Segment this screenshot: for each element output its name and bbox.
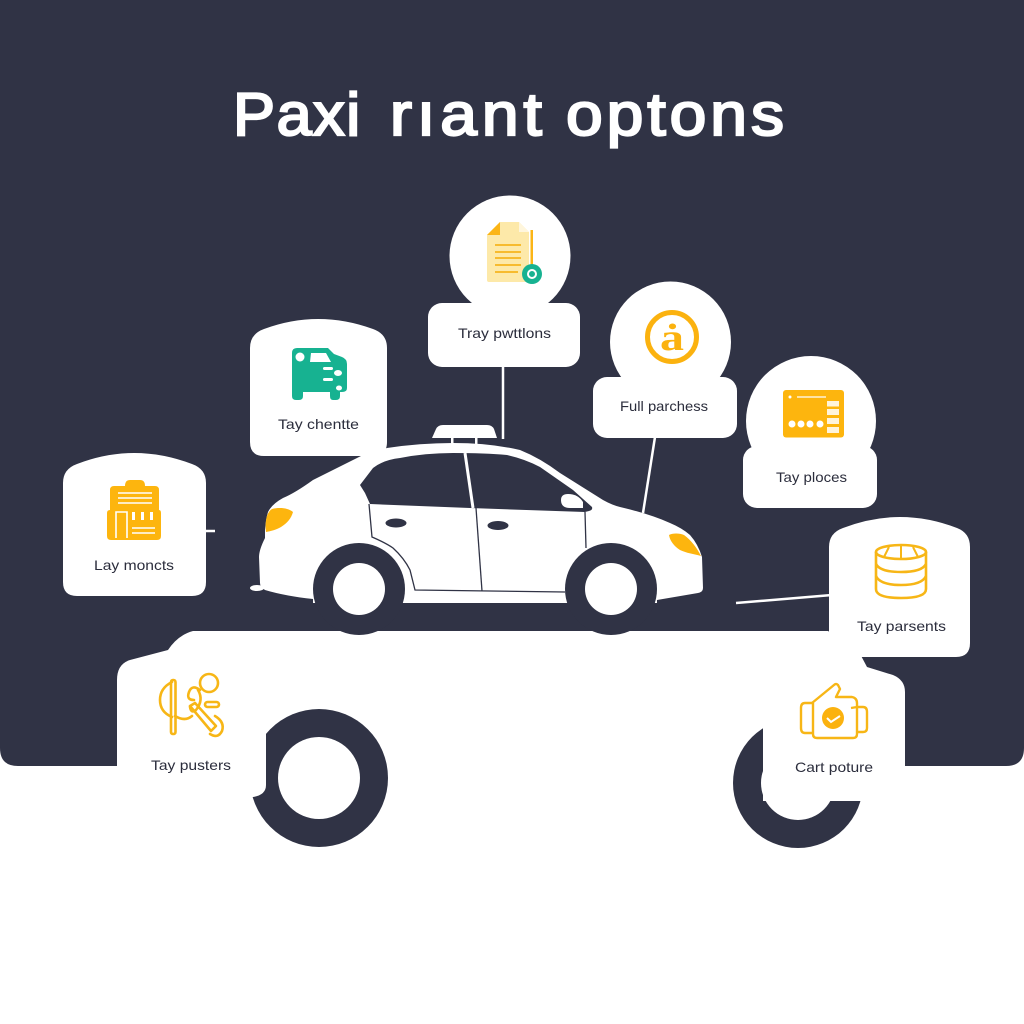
car illustration [250,425,703,635]
icon: payment terminal [783,390,844,438]
rear marker [250,585,264,591]
icon: coin [648,312,696,362]
label: Tay pusters: Tay pusters [151,757,231,773]
left large wheel [200,700,388,847]
label: Tay ploces [776,469,847,485]
icon: tools [160,674,223,736]
card: Tay parsents [829,517,970,657]
window pillar [465,453,473,508]
icon: thumbs up with check [801,684,867,738]
label: Tray pwttlons [458,325,551,341]
label: Lay moncts [94,557,174,573]
card: Lay moncts [63,453,206,596]
right large wheel [733,700,905,848]
mirror [561,494,583,508]
dark background panel [0,0,1024,766]
icon: shop building [107,480,161,540]
label: Tay chentte [278,416,359,432]
door handles [386,518,508,530]
roof sign [432,425,497,445]
car body [259,443,703,603]
card: Tay ploces [743,356,877,508]
card: Tray pwttlons [428,196,580,367]
label: Full parchess [620,398,708,414]
icon: database stack [876,545,926,598]
title [233,81,788,149]
card: Full parchess [593,282,737,438]
door lines [369,504,586,592]
window [360,453,592,512]
rear wheel [313,543,405,635]
title: optons [566,82,788,148]
connector lines [204,365,832,603]
head light [669,534,701,556]
card: Tay chentte [250,319,387,456]
label: Cart poture: Cart poture [795,759,873,775]
title: rıant [390,82,547,148]
title: Paxi [233,81,362,149]
icon: teal car [292,348,347,400]
icon: document [487,222,542,284]
icon: coin: ȧ [660,317,684,359]
large lower car silhouette [117,631,905,848]
front wheel [565,543,657,635]
tail light [266,508,293,532]
label: Tay parsents [857,618,946,634]
